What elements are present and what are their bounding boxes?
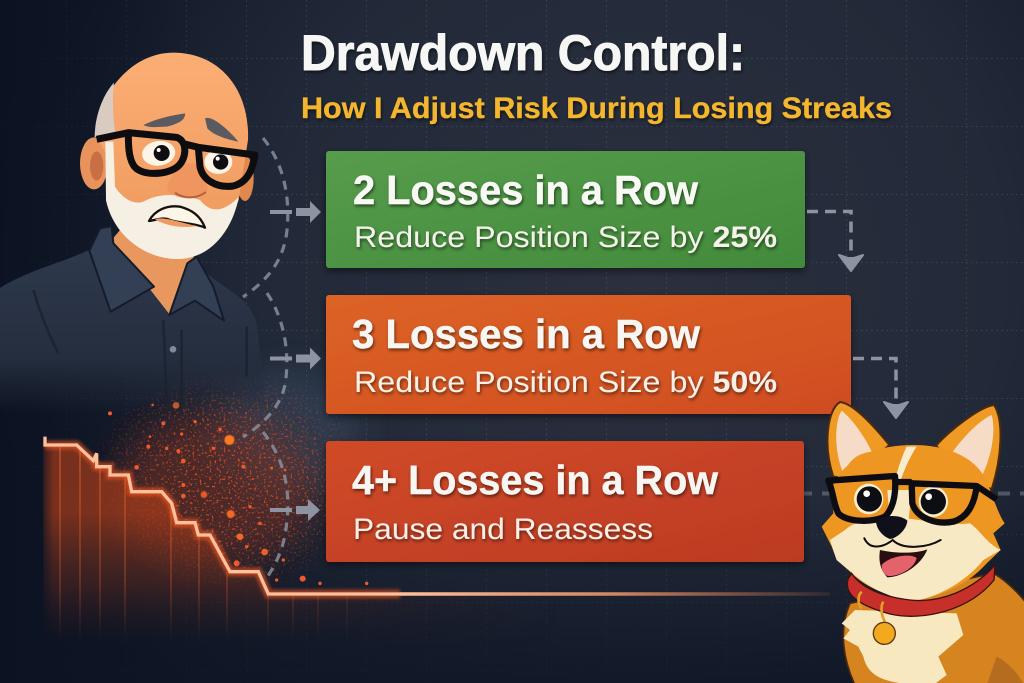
equity line (45, 437, 400, 594)
ember particles (108, 402, 368, 585)
card 1: green (326, 151, 805, 268)
dog character (822, 402, 1024, 683)
arrow: to card 3 (270, 499, 320, 521)
collar (847, 565, 995, 616)
nose (168, 163, 208, 198)
body (843, 573, 1024, 683)
mouth (149, 206, 205, 228)
card 3: red (326, 441, 804, 562)
chest fur (842, 610, 963, 683)
eyes (140, 139, 177, 168)
card 2 heading: 3 Losses in a Row (352, 311, 700, 357)
collar (89, 226, 154, 312)
ears (828, 402, 889, 478)
card 2: orange (326, 295, 851, 414)
equity line tail (400, 592, 830, 596)
drawdown chart (42, 368, 425, 637)
glasses (97, 133, 255, 186)
card 1 detail: Reduce Position Size by 25% (354, 221, 777, 254)
beard (105, 142, 239, 259)
flow connectors left (243, 138, 288, 576)
card 1 heading: 2 Losses in a Row (353, 167, 698, 213)
card 2 detail: Reduce Position Size by 50% (354, 366, 777, 399)
man character (0, 53, 265, 413)
title (301, 25, 892, 125)
arrow: to card 1 (270, 201, 321, 223)
glow under line (45, 445, 400, 594)
glasses (828, 476, 997, 523)
speckle embers (96, 371, 356, 592)
head (96, 53, 248, 257)
head (822, 445, 1005, 599)
mouth (879, 549, 927, 577)
card 3 heading: 4+ Losses in a Row (352, 457, 718, 503)
arrow: card 1 to card 2 (807, 212, 863, 271)
face fur (830, 517, 1001, 601)
chart area fill (43, 445, 425, 628)
arrow: to card 2 (270, 348, 321, 370)
tag (859, 592, 895, 644)
eyebrows (143, 113, 185, 127)
card 3 detail: Pause and Reassess (353, 513, 653, 546)
title line 2: How I Adjust Risk During Losing Streaks (301, 92, 892, 125)
arrow: card 2 to card 3 (853, 358, 908, 418)
nose (876, 516, 907, 539)
grey hair (95, 83, 115, 137)
ears (80, 137, 108, 189)
shirt (0, 249, 265, 413)
neck (112, 230, 197, 315)
title line 1: Drawdown Control: (301, 25, 745, 81)
eyes (854, 484, 883, 514)
